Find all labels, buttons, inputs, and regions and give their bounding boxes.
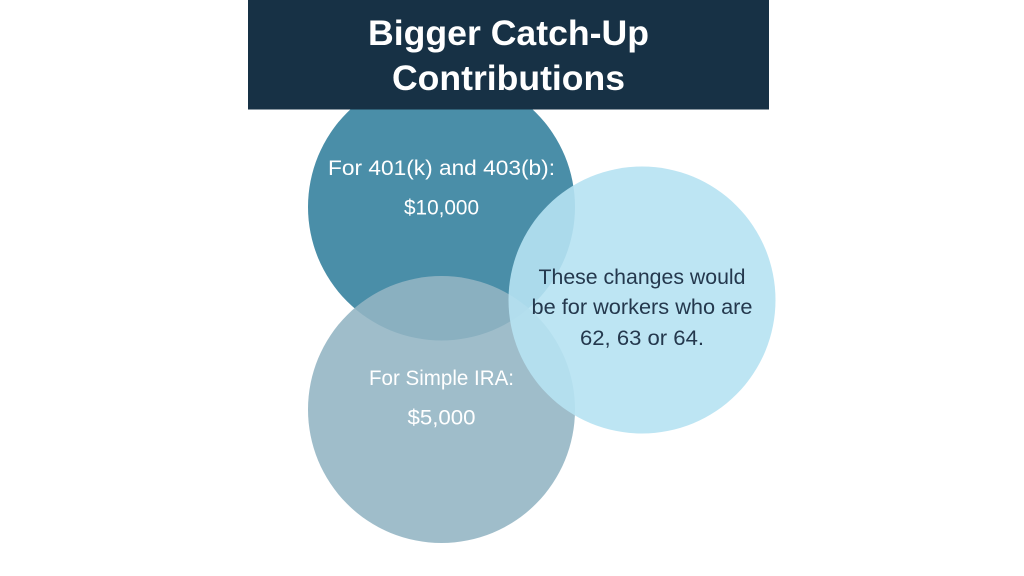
header banner bbox=[248, 0, 769, 110]
text: age note: be for workers who are bbox=[532, 296, 752, 319]
text: 401(k) and 403(b) limit bbox=[328, 157, 555, 220]
text: age note: 62, 63 or 64. bbox=[580, 327, 704, 350]
panel: age note circle bbox=[508, 166, 776, 434]
text: Simple IRA limit bbox=[369, 367, 514, 430]
text: Simple IRA limit: $5,000 bbox=[408, 406, 476, 430]
text: age note bbox=[532, 266, 752, 350]
panel: Simple IRA circle bbox=[308, 276, 575, 543]
text: Simple IRA limit: For Simple IRA: bbox=[369, 367, 514, 390]
text: 401(k) and 403(b) limit: $10,000 bbox=[404, 196, 479, 220]
panel: 401(k) and 403(b) circle bbox=[308, 74, 575, 340]
text: 401(k) and 403(b) limit: For 401(k) and 403(b): bbox=[328, 157, 555, 180]
title: Bigger Catch-Up bbox=[368, 14, 649, 53]
title bbox=[368, 14, 649, 98]
title: Contributions bbox=[392, 59, 625, 98]
text: age note: These changes would bbox=[538, 266, 746, 289]
